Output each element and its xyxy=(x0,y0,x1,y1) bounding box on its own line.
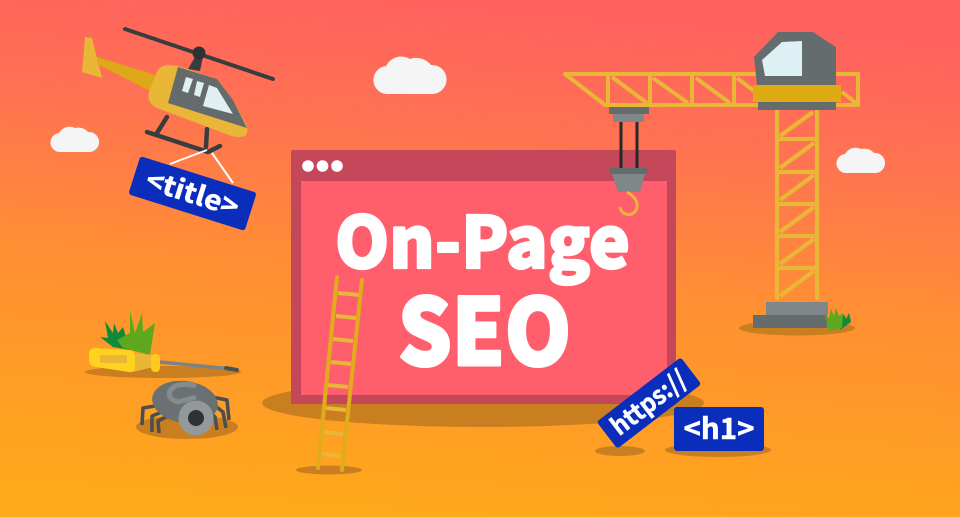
ladder shadow xyxy=(296,466,362,474)
robot shell marking xyxy=(169,384,196,402)
ground shadow xyxy=(85,366,241,378)
heading line 1: On-Page xyxy=(335,187,630,289)
h1 tag: <h1> xyxy=(684,406,754,448)
trolley top xyxy=(609,107,649,114)
crane foot lower xyxy=(753,315,827,328)
screwdriver tip xyxy=(226,368,237,370)
helicopter xyxy=(82,29,273,183)
hook cables xyxy=(621,122,637,168)
crane cab xyxy=(754,32,836,85)
ladder rungs xyxy=(321,293,360,456)
window content area xyxy=(301,181,667,395)
cab window xyxy=(762,41,802,76)
screwdriver and grass xyxy=(85,310,241,378)
robot lens ring xyxy=(178,400,214,436)
crane collar xyxy=(753,85,841,102)
title sign: <title> xyxy=(141,159,245,225)
tail fin xyxy=(82,37,102,78)
rotor hub xyxy=(192,46,206,60)
cabin windows xyxy=(182,77,233,114)
crane hook assembly xyxy=(609,107,649,215)
window dots xyxy=(302,160,343,172)
screwdriver collar xyxy=(151,354,160,372)
handle grip xyxy=(100,355,127,363)
main rotor xyxy=(125,29,273,79)
window frame xyxy=(291,150,676,404)
grass light xyxy=(117,310,155,355)
trolley lower xyxy=(613,114,644,122)
crane mast xyxy=(777,110,817,300)
landing skids xyxy=(147,117,220,152)
crane foot upper xyxy=(766,302,828,315)
screwdriver handle xyxy=(89,348,135,372)
cabin xyxy=(168,67,247,128)
title sign xyxy=(128,155,257,231)
crane base shadow xyxy=(739,320,855,336)
https tag: https:// xyxy=(602,361,694,443)
cloud center xyxy=(373,57,447,94)
spider robot xyxy=(136,377,238,439)
shadows under tags xyxy=(595,443,771,457)
hook block top xyxy=(609,168,648,174)
hook xyxy=(620,192,637,215)
robot body xyxy=(149,377,221,427)
collar base xyxy=(758,102,836,110)
cloud right xyxy=(836,148,885,173)
crane jib xyxy=(565,74,858,105)
browser window xyxy=(291,150,676,404)
grass dark xyxy=(100,321,130,350)
window shadow xyxy=(262,379,704,427)
robot legs xyxy=(142,397,229,433)
crane xyxy=(565,32,858,336)
heading line 2: SEO xyxy=(398,259,571,392)
hook block xyxy=(612,174,645,192)
fuselage xyxy=(148,65,247,137)
screwdriver neck xyxy=(133,353,153,372)
robot shadow xyxy=(136,415,238,439)
screwdriver shaft xyxy=(160,362,232,369)
ladder rails xyxy=(318,277,362,470)
cloud left xyxy=(50,127,99,152)
rotor mast xyxy=(188,57,203,71)
tail boom xyxy=(97,57,155,92)
ladder xyxy=(296,277,362,474)
grass by crane xyxy=(825,308,851,331)
robot lens xyxy=(188,410,204,426)
ropes xyxy=(170,150,233,183)
